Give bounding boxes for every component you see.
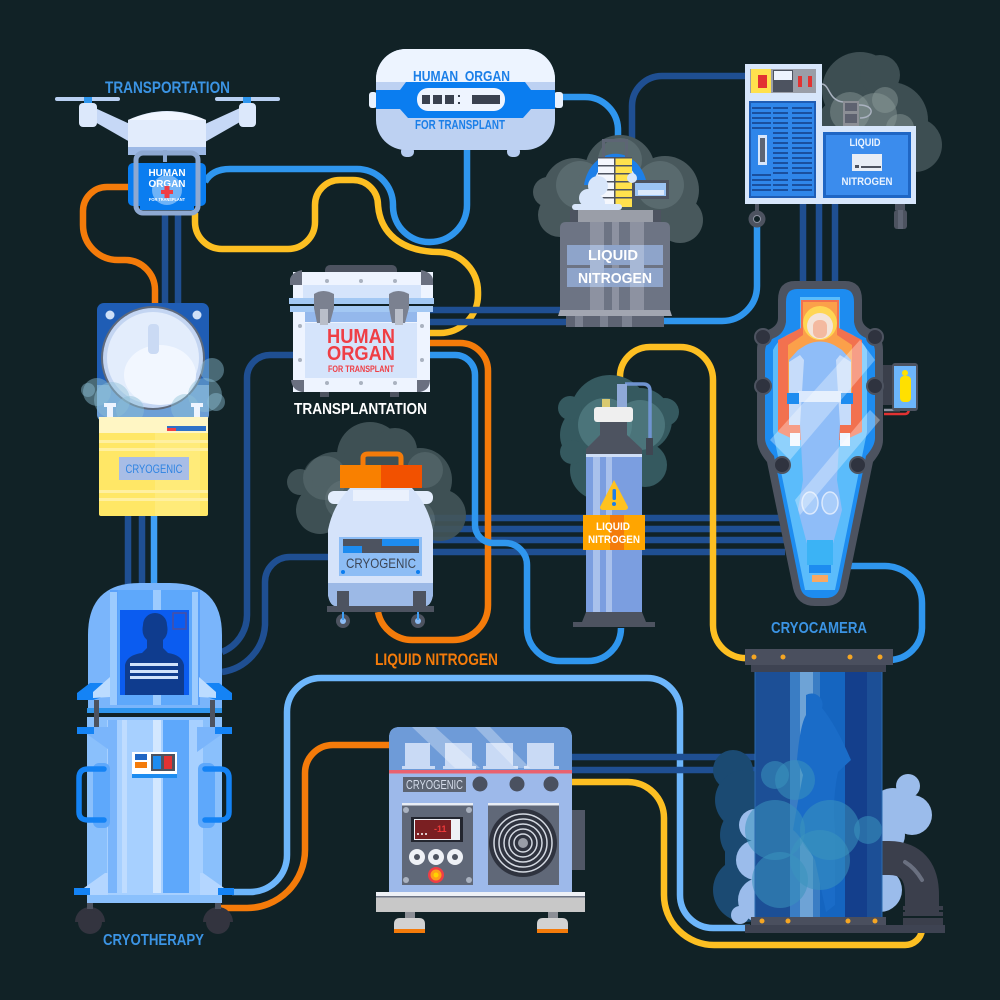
cryogenic plate: CRYOGENIC: [406, 778, 463, 792]
freezer machine: [376, 727, 585, 933]
pipe: dark blue freezer to cylinder: [570, 757, 758, 770]
pod upper section: [88, 583, 222, 710]
arms and motors: [79, 103, 256, 142]
inner chamber: [765, 289, 875, 598]
case corners: [290, 270, 433, 392]
side block: [572, 810, 585, 870]
pipe: dark blue tank to control unit: [632, 76, 746, 140]
cargo box: ORGAN: [148, 179, 186, 190]
glass reflection: [412, 727, 530, 768]
pipe: blue tank to control unit: [662, 225, 757, 321]
bottle label: [583, 515, 645, 550]
x-ray window: [120, 610, 189, 695]
fan: [488, 803, 559, 885]
container body: [328, 488, 433, 606]
pipe: orange case to cryogenic container: [378, 343, 488, 640]
label: liquid nitrogen: LIQUID NITROGEN: [375, 651, 498, 669]
cooler unit and wire: [822, 84, 871, 126]
cargo box: [128, 150, 206, 213]
tank top dome: [584, 154, 647, 185]
machine body: [389, 727, 572, 892]
human organ case: [289, 265, 434, 397]
pipe: dark blue case to tank: [430, 310, 570, 322]
label: cryotherapy: CRYOTHERAPY: [103, 932, 204, 949]
table feet: [394, 912, 568, 933]
pipe: blue organ box to tank: [553, 97, 618, 142]
patient figure: [787, 313, 853, 582]
liquid nitrogen panel: NITROGEN: [842, 176, 893, 188]
pipe: dark blue control unit to cryocamera: [803, 200, 835, 290]
pipe: yellow freezer to base: [570, 782, 922, 945]
white vapour: [572, 173, 637, 211]
warning triangle: [600, 480, 628, 510]
side handles: [79, 763, 229, 828]
pipe: orange drone to lens: [83, 187, 155, 305]
smoke around lens: [81, 358, 225, 424]
tank label: [567, 245, 663, 287]
pipe: orange therapy to freezer: [218, 745, 392, 908]
case rivets: [298, 279, 424, 385]
case lettering: ORGAN: [327, 343, 395, 365]
foot brackets: [74, 873, 234, 895]
control unit: [745, 64, 916, 229]
bottle label: NITROGEN: [588, 534, 640, 546]
pipe: light blue therapy to cylinder: [232, 678, 750, 928]
pipe: dark blue case to therapy: [222, 355, 295, 652]
label: transportation: TRANSPORTATION: [105, 79, 230, 97]
bottle label: LIQUID: [596, 521, 630, 533]
pipe: blue case to bottle: [430, 355, 621, 661]
lung scanner lens: [97, 303, 209, 421]
glass cylinder: [745, 670, 882, 918]
pipe: dark blue yellow box to therapy: [128, 514, 142, 588]
liquid nitrogen panel: LIQUID: [850, 137, 881, 149]
pipe: dark blue drone to lens: [165, 212, 178, 305]
case lettering: [327, 326, 395, 375]
case lettering: HUMAN: [327, 326, 395, 348]
connecting pipes: [83, 76, 922, 945]
bottle hose: [625, 384, 650, 453]
cryocamera: [755, 281, 918, 606]
smoke behind control unit: [815, 52, 942, 172]
pipe: blue cryocamera to cylinder: [850, 566, 922, 660]
wheels: [75, 895, 233, 934]
container base and wheels: [327, 591, 434, 628]
liquid nitrogen panel: [823, 132, 911, 198]
knob: [748, 204, 766, 228]
pipe: light blue yellow box to therapy: [151, 514, 157, 588]
tank body: [570, 210, 660, 223]
container side handles: [328, 491, 433, 504]
bottle body: [586, 454, 642, 612]
cylinder smoke behind: [713, 750, 932, 924]
label: cryocamera: CRYOCAMERA: [771, 620, 867, 637]
glass reflections: [770, 340, 880, 515]
pipe: yellow bottle to cylinder: [620, 347, 748, 658]
tank label: NITROGEN: [578, 270, 652, 287]
label: transplantation: TRANSPLANTATION: [294, 401, 427, 418]
yellow cryogenic box: [99, 417, 208, 516]
table top: [376, 892, 585, 912]
propellers: [55, 97, 280, 104]
case latches: [314, 291, 409, 325]
organ transport box: [369, 49, 563, 157]
hinges: [755, 329, 883, 473]
cryotherapy pod: [74, 583, 234, 934]
pipe: blue drone to organ box: [205, 150, 467, 242]
nitrogen bottle: [573, 384, 655, 627]
tank monitor: [632, 180, 669, 199]
cargo box: HUMAN: [148, 168, 186, 179]
elbow exhaust pipe: [860, 858, 943, 926]
control panel switches: [750, 69, 816, 93]
control board: -11: [434, 824, 447, 834]
smoke in front: [745, 760, 882, 908]
dials: [472, 776, 558, 792]
drone: [55, 97, 280, 213]
smoke behind nitrogen tank: [533, 135, 703, 255]
side oxygen box: [882, 363, 918, 414]
liquid nitrogen tank: [558, 139, 672, 327]
capacitors: [402, 743, 559, 769]
smoke behind cryogenic container: [287, 422, 466, 550]
clips: [104, 403, 203, 418]
sample racks: [598, 139, 632, 207]
thermal halo: [778, 300, 862, 440]
outer shell: [757, 281, 883, 606]
smoke behind bottle: [558, 375, 679, 500]
pod lower section: [87, 717, 222, 903]
organ transport box: FOR TRANSPLANT: [415, 117, 505, 132]
control board: [402, 803, 473, 885]
tank label: LIQUID: [588, 247, 638, 264]
frozen figure: [793, 693, 851, 912]
case lettering: FOR TRANSPLANT: [328, 364, 394, 375]
container handle: [363, 454, 401, 466]
control panel: [132, 752, 177, 778]
ventilation panel: [749, 101, 816, 198]
side latches: [77, 677, 232, 752]
drone body: [128, 111, 206, 155]
cylinder caps: [745, 649, 945, 933]
pipe: dark blue container to therapy: [222, 557, 330, 672]
cryogenic container: [327, 454, 434, 628]
pipe: yellow drone to case: [195, 180, 478, 333]
caster: [894, 204, 907, 229]
organ transport box: HUMAN ORGAN: [413, 68, 510, 85]
cargo box: FOR TRANSPLANT: [149, 197, 185, 202]
yellow cryogenic box: CRYOGENIC: [126, 462, 183, 476]
pipe: dark blue horizontal bundle: [430, 518, 785, 552]
cryogenic container: CRYOGENIC: [346, 555, 416, 571]
container lid: [340, 465, 422, 488]
bottle cap: [586, 384, 642, 454]
